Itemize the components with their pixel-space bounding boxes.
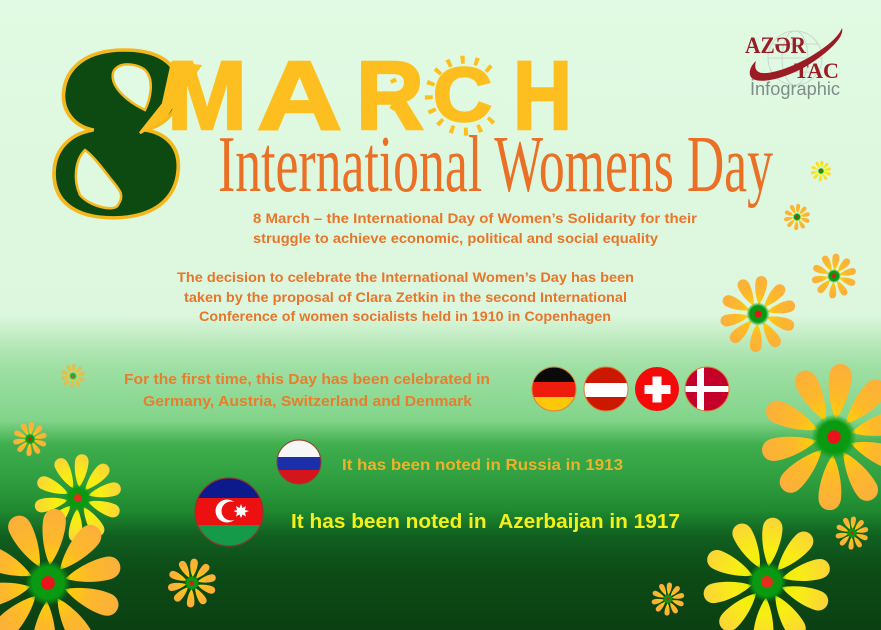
flower: left dim xyxy=(61,364,85,388)
flower: right small 3 xyxy=(811,253,857,299)
logo word AZƏR: AZƏR xyxy=(745,33,806,58)
letter H: H xyxy=(513,41,572,150)
flower: bottom left large xyxy=(0,508,123,630)
flower: top right small xyxy=(811,161,831,181)
logo globe xyxy=(768,31,822,85)
text block: Clara Zetkin: taken by the proposal of Clara Zetkin in the second International xyxy=(184,290,627,305)
letter M: M xyxy=(167,41,247,150)
flower: right large xyxy=(760,363,881,511)
text block: definition xyxy=(253,211,698,246)
flag: Russia xyxy=(276,440,322,484)
text block: Clara Zetkin: Conference of women socialists held in 1910 in Copenhagen xyxy=(199,309,611,324)
lower counter of the 8 xyxy=(76,150,121,208)
filled upper lobe of the 8 xyxy=(80,54,164,130)
heading: MARCH xyxy=(140,41,572,150)
logo: AZERTAC Infographic xyxy=(745,28,842,99)
upper counter of the 8 xyxy=(113,64,151,110)
numeral 8: 8 xyxy=(39,1,198,266)
flower: bottom small 1 xyxy=(651,582,685,616)
logo swoosh xyxy=(750,28,842,81)
text block: definition: struggle to achieve economic, political and social equality xyxy=(253,231,659,246)
text block: first celebrated: Germany, Austria, Switzerland and Denmark xyxy=(143,394,473,410)
flag: Austria xyxy=(584,366,628,412)
flag: Denmark xyxy=(684,366,730,412)
logo word Infographic: İnfographic xyxy=(750,79,840,99)
flower: bottom small 2 xyxy=(835,516,869,550)
letter A: A xyxy=(257,41,342,150)
flower: left small xyxy=(13,422,47,456)
sun rays on R xyxy=(370,64,396,111)
text: Russia 1913: It has been noted in Russia in 1913 xyxy=(342,457,623,474)
M flourish xyxy=(140,63,200,133)
flower: right medium xyxy=(719,275,796,352)
flower: bottom right yellow xyxy=(702,517,832,630)
logo word TAC: TAC xyxy=(794,58,839,83)
text block: first celebrated: For the first time, this Day has been celebrated in xyxy=(124,372,490,388)
flag: Azerbaijan xyxy=(195,478,263,547)
text block: Clara Zetkin xyxy=(177,270,634,324)
flag: Switzerland xyxy=(635,367,679,411)
filled lower lobe of the 8 xyxy=(58,128,174,216)
flower: right small 2 xyxy=(784,204,810,230)
letter C: C xyxy=(433,53,492,138)
flower: left yellow xyxy=(34,454,122,542)
sun rays on C xyxy=(429,60,493,132)
flower: bottom centre small xyxy=(167,558,217,608)
letter R: R xyxy=(356,41,424,150)
text block: definition: 8 March – the International Day of Women’s Solidarity for their xyxy=(253,211,698,226)
flag: Germany xyxy=(532,366,576,412)
text block: Clara Zetkin: The decision to celebrate the International Women’s Day has been xyxy=(177,270,634,285)
text block: first celebrated xyxy=(124,372,490,410)
text: Azerbaijan 1917: It has been noted in Azerbaijan in 1917 xyxy=(291,510,680,533)
